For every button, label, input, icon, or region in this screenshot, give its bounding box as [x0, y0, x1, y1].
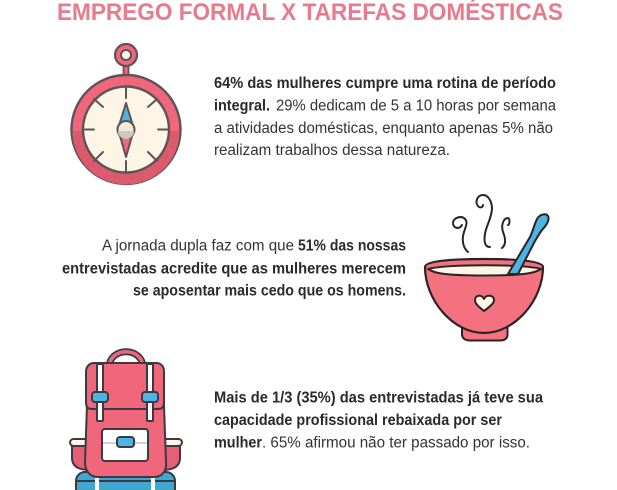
text block: rotina: integral.: [214, 98, 270, 114]
text block: capacidade profissional: capacidade profissional rebaixada por ser: [214, 412, 502, 429]
text block: rotina: a atividades domésticas, enquanto apenas 5% não: [214, 120, 553, 137]
text block: capacidade profissional: Mais de 1/3 (35%) das entrevistadas já teve sua: [214, 390, 543, 406]
text block: rotina: realizam trabalhos dessa natureza.: [214, 142, 450, 159]
icon: backpack: [70, 352, 182, 490]
text block: jornada dupla: [62, 238, 406, 300]
text block: capacidade profissional: [214, 390, 543, 452]
text block: jornada dupla: A jornada dupla faz com que: [102, 238, 294, 254]
text block: jornada dupla: 51% das nossas: [298, 238, 406, 254]
text block: rotina: 29% dedicam de 5 a 10 horas por semana: [276, 98, 556, 114]
text block: rotina: 64% das mulheres cumpre uma rotina de período: [214, 75, 556, 92]
text block: jornada dupla: entrevistadas acredite que as mulheres merecem: [62, 260, 406, 278]
icon: bowl: [425, 195, 549, 340]
text block: capacidade profissional: mulher: [214, 434, 262, 452]
text block: jornada dupla: se aposentar mais cedo que os homens.: [133, 282, 406, 300]
text block: rotina: [214, 75, 556, 159]
icon: compass: [72, 44, 180, 184]
text block: capacidade profissional: . 65% afirmou não ter passado por isso.: [262, 434, 530, 452]
